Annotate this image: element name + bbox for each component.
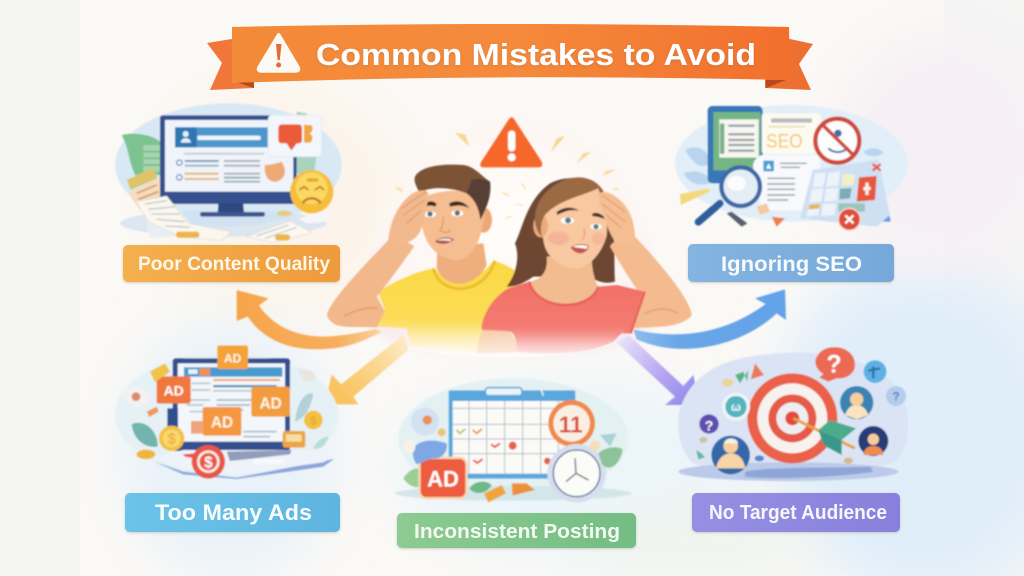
icon: warning triangle centre bbox=[480, 117, 542, 167]
leaves and money bbox=[122, 134, 168, 210]
target bbox=[747, 373, 837, 463]
illustration: calendar and clock bbox=[395, 378, 632, 503]
tablet bbox=[708, 106, 763, 183]
panel: people with warning bbox=[327, 117, 692, 358]
panel: inconsistent posting bbox=[395, 378, 636, 548]
AD badges: AD bbox=[211, 415, 233, 432]
papers bbox=[136, 196, 332, 243]
calendar bbox=[449, 386, 575, 479]
clock bbox=[547, 444, 606, 503]
man's hand bbox=[388, 190, 428, 244]
label: no target audience bbox=[692, 493, 900, 532]
sparks bbox=[394, 133, 620, 221]
panel: poor content quality bbox=[115, 103, 342, 282]
AD badge: AD bbox=[427, 467, 459, 492]
audience: ω bbox=[731, 400, 741, 414]
label: ignoring SEO bbox=[688, 244, 894, 282]
coins: $ bbox=[204, 454, 213, 471]
speech question bbox=[815, 347, 855, 382]
panel: too many ads bbox=[115, 346, 340, 532]
man's ear bbox=[475, 207, 492, 233]
man's brows and eyes bbox=[420, 201, 469, 244]
date badge bbox=[548, 400, 595, 447]
laptop bbox=[154, 358, 334, 479]
label: ignoring SEO: Ignoring SEO bbox=[721, 253, 862, 276]
woman's neck bbox=[529, 255, 598, 313]
label: too many ads: Too Many Ads bbox=[155, 500, 312, 525]
illustration: monitor and papers bbox=[115, 103, 342, 243]
label: poor content quality: Poor Content Quality bbox=[138, 254, 330, 275]
leaves bbox=[122, 368, 328, 449]
man's shirt bbox=[377, 261, 520, 353]
SEO card bbox=[762, 113, 821, 154]
decorative shapes bbox=[696, 363, 853, 464]
woman's arm lower bbox=[477, 330, 517, 353]
banner ribbon bbox=[232, 24, 790, 83]
illustration: SEO documents bbox=[675, 105, 908, 230]
label: inconsistent posting: Inconsistent Posting bbox=[414, 521, 620, 543]
document bbox=[753, 155, 820, 211]
magnifier bbox=[680, 167, 785, 227]
coins: $ bbox=[310, 415, 317, 427]
panel: no target audience bbox=[678, 347, 908, 532]
calendar bbox=[800, 159, 891, 230]
audience bbox=[699, 360, 906, 474]
centre halo bbox=[366, 118, 656, 354]
icon: warning triangle bbox=[258, 34, 300, 72]
man's neck bbox=[437, 243, 487, 284]
label: poor content quality bbox=[123, 245, 340, 282]
sad emoji bbox=[290, 170, 333, 213]
person: woman bbox=[477, 177, 692, 354]
woman's hair top bbox=[535, 177, 607, 237]
arrow: to too many ads bbox=[325, 335, 408, 404]
arrow: to ignoring SEO bbox=[633, 289, 786, 349]
no symbol bbox=[815, 119, 859, 163]
woman's hair back bbox=[507, 178, 615, 287]
coins bbox=[137, 363, 323, 478]
AD badges: AD bbox=[164, 383, 184, 399]
coins: $ bbox=[168, 432, 176, 448]
label: too many ads bbox=[125, 493, 340, 532]
date badge: 11 bbox=[559, 411, 583, 437]
woman's features bbox=[557, 208, 606, 253]
flowers and leaves bbox=[403, 408, 623, 502]
AD badges bbox=[157, 346, 290, 436]
label: inconsistent posting bbox=[397, 513, 636, 548]
SEO card: SEO bbox=[766, 131, 803, 152]
audience: ? bbox=[892, 389, 900, 403]
label: no target audience: No Target Audience bbox=[709, 502, 887, 524]
base fade bbox=[400, 327, 627, 358]
person: man bbox=[327, 165, 520, 353]
illustration: target and audience bbox=[678, 347, 908, 481]
AD badge bbox=[403, 457, 468, 499]
man's head bbox=[420, 191, 484, 260]
woman's arm bbox=[610, 235, 692, 328]
AD badges: AD bbox=[260, 395, 282, 412]
banner tails bbox=[207, 39, 813, 90]
speech card bbox=[268, 115, 322, 157]
arrow: to poor content quality bbox=[237, 290, 382, 349]
panel: ignoring SEO bbox=[675, 105, 908, 282]
man's hair bbox=[415, 165, 490, 220]
speech question: ? bbox=[826, 352, 842, 379]
illustration: laptop with ads bbox=[115, 346, 338, 479]
woman's shirt bbox=[482, 282, 645, 354]
title text: Common Mistakes to Avoid bbox=[316, 37, 756, 72]
audience: ? bbox=[705, 418, 713, 434]
arrow: to no target audience bbox=[613, 336, 699, 405]
title banner bbox=[207, 24, 813, 90]
monitor bbox=[160, 115, 297, 217]
man's arm bbox=[327, 239, 414, 327]
woman's hand bbox=[598, 192, 635, 246]
arrow in target bbox=[793, 418, 856, 455]
woman's face bbox=[542, 188, 608, 268]
AD badges: AD bbox=[224, 351, 242, 365]
